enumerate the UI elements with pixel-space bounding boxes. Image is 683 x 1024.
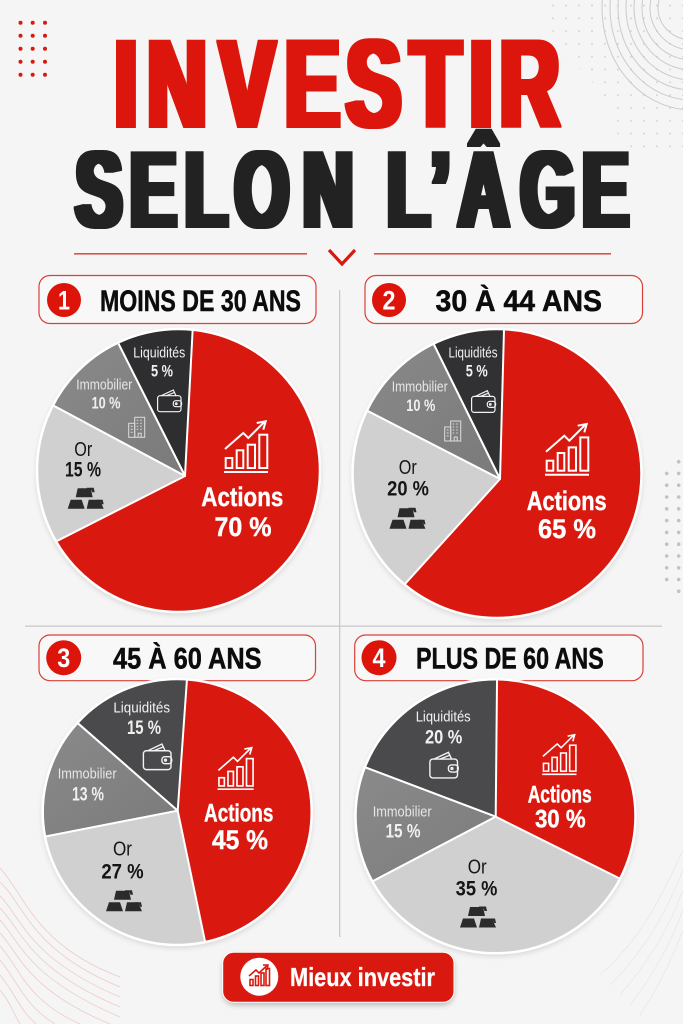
header pill 3	[39, 635, 316, 681]
label: Or 15 %: Or	[74, 439, 93, 461]
icon: wallet	[472, 391, 496, 412]
header pill 4: 4	[372, 643, 386, 673]
label: Liquidités 5 %: Liquidités	[133, 345, 185, 361]
title line: SELON L'ÂGE: SELON L’ÂGE	[76, 129, 629, 251]
decoration: red dot grid	[18, 21, 47, 77]
label: Or 35 %: Or	[468, 856, 487, 878]
button: Mieux investir	[223, 952, 454, 1005]
label: Or 35 %	[456, 856, 498, 901]
label: Liquidités 5 %: Liquidités	[448, 345, 498, 361]
label: Liquidités 5 %: 5 %	[151, 362, 173, 381]
pie chart 3	[40, 680, 314, 950]
label: Or 15 %: 15 %	[65, 459, 101, 482]
decoration: grey wave lines	[600, 850, 683, 1015]
label: Liquidités 15 %: Liquidités	[113, 701, 170, 717]
label: Actions 45 %: Actions	[204, 800, 273, 828]
title line: INVESTIR: INVESTIR	[115, 15, 559, 154]
label: Immobilier 10 %: Immobilier	[76, 377, 132, 393]
label: Actions 70 %	[201, 482, 283, 542]
label: Liquidités 15 %: 15 %	[127, 718, 161, 739]
header pill 2: 2	[382, 286, 396, 316]
label: Or 20 %: 20 %	[387, 478, 429, 501]
label: Immobilier 15 %	[373, 805, 432, 843]
label: Immobilier 13 %: 13 %	[72, 785, 104, 806]
label: Liquidités 15 %	[113, 701, 170, 739]
panel: 30 à 44 ans	[350, 274, 644, 622]
decoration: red wave lines	[0, 868, 120, 1024]
label: Liquidités 5 %	[133, 345, 185, 381]
icon: wallet	[158, 390, 182, 412]
label: Immobilier 15 %: 15 %	[386, 822, 421, 843]
title	[76, 15, 629, 251]
label: Or 27 %: 27 %	[101, 860, 144, 883]
icon: rising chart	[224, 421, 268, 472]
pie chart 4	[354, 680, 638, 958]
icon: gold bars	[460, 906, 496, 928]
icon: button chart	[249, 965, 270, 986]
label: Actions 30 %	[528, 781, 592, 833]
header pill 3: 3	[57, 643, 70, 673]
label: Actions 70 %: Actions	[201, 482, 283, 512]
icon: gold bars	[68, 488, 104, 509]
panel: moins de 30 ans	[10, 276, 320, 615]
icon: wallet	[143, 744, 172, 770]
header pill 1: MOINS DE 30 ANS	[100, 285, 301, 318]
header pill 1	[39, 276, 316, 324]
icon: building	[129, 417, 145, 437]
label: Liquidités 20 %: 20 %	[425, 727, 462, 748]
header pill 3: 45 À 60 ANS	[113, 642, 262, 676]
label: Immobilier 10 %: 10 %	[406, 396, 435, 415]
icon: rising chart	[542, 735, 576, 774]
label: Or 20 %: Or	[399, 457, 417, 479]
icon: rising chart	[218, 748, 254, 789]
decoration: right dot column	[665, 460, 680, 593]
label: Or 27 %: Or	[113, 839, 132, 861]
label: Immobilier 10 %: 10 %	[92, 394, 120, 413]
label: Actions 30 %: 30 %	[535, 805, 586, 833]
decoration: grey dot field	[540, 0, 683, 152]
label: Actions 65 %: Actions	[527, 486, 607, 516]
label: Actions 30 %: Actions	[528, 781, 592, 808]
label: Actions 70 %: 70 %	[214, 512, 272, 542]
pie chart 2	[350, 328, 644, 622]
icon: gold bars	[106, 890, 142, 911]
label: Actions 65 %: 65 %	[538, 514, 596, 544]
header pill 4: PLUS DE 60 ANS	[416, 642, 604, 676]
label: Actions 65 %	[527, 486, 607, 544]
pie chart 1	[35, 328, 322, 616]
divider with chevron	[74, 250, 611, 264]
label: Immobilier 10 %	[392, 380, 448, 415]
label: Actions 45 %	[204, 800, 273, 855]
icon: rising chart	[545, 424, 589, 475]
header pill 2: 30 À 44 ANS	[436, 284, 602, 318]
label: Or 20 %	[387, 457, 429, 501]
label: Or 15 %	[65, 439, 101, 482]
icon: wallet	[430, 752, 458, 778]
label: Actions 45 %: 45 %	[212, 825, 268, 855]
label: Immobilier 13 %	[58, 767, 117, 806]
decoration: concentric arcs	[602, 0, 683, 110]
label: Immobilier 13 %: Immobilier	[58, 767, 117, 783]
label: Liquidités 5 %: 5 %	[466, 362, 488, 381]
label: Immobilier 10 %	[76, 377, 132, 413]
label: Liquidités 20 %	[416, 710, 471, 748]
label: Or 27 %	[101, 839, 144, 883]
header pill 2	[365, 276, 642, 324]
label: Immobilier 10 %: Immobilier	[392, 380, 448, 396]
panel: plus de 60 ans	[354, 634, 644, 958]
label: Immobilier 15 %: Immobilier	[373, 805, 432, 821]
icon: gold bars	[390, 508, 426, 529]
label: Or 35 %: 35 %	[456, 878, 498, 901]
icon: building	[445, 421, 461, 441]
label: Liquidités 5 %	[448, 345, 498, 381]
panel: 45 à 60 ans	[38, 634, 316, 950]
label: Liquidités 20 %: Liquidités	[416, 710, 471, 726]
header pill 4	[355, 635, 643, 681]
grid separators	[25, 290, 662, 937]
button: Mieux investir: Mieux investir	[290, 962, 435, 992]
header pill 1: 1	[58, 286, 70, 316]
